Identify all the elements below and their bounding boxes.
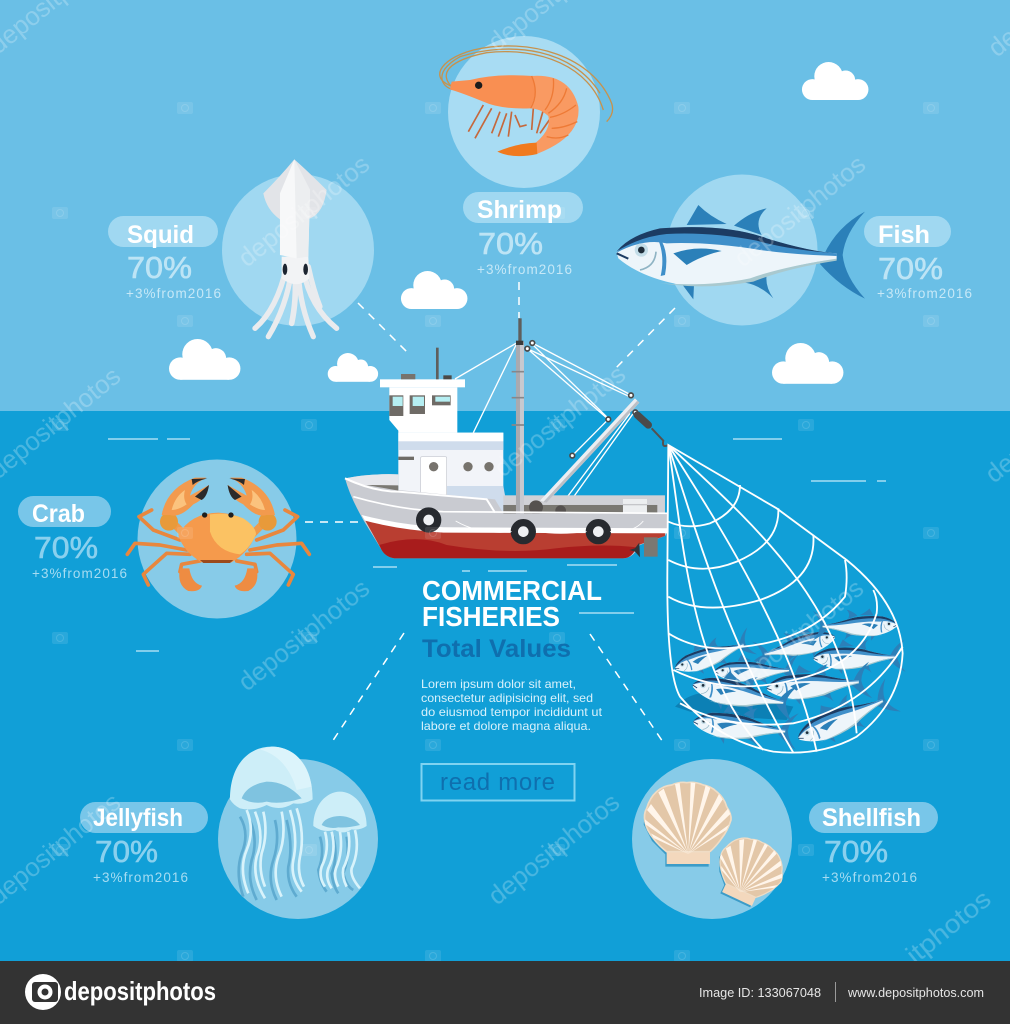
read more button: [422, 764, 574, 800]
dashed connector lines: [305, 282, 675, 745]
squid percent: 70%: [127, 250, 192, 285]
shellfish label pill: [809, 802, 938, 833]
shellfish percent: 70%: [824, 834, 888, 869]
jellyfish percent: 70%: [95, 834, 158, 869]
crab name: Crab: [32, 500, 85, 528]
fish percent: 70%: [878, 251, 943, 286]
central text block: [421, 575, 603, 800]
watermark: itphotos: [900, 883, 996, 970]
panel: squid: [108, 159, 374, 337]
illustration: fishing boat: [345, 318, 668, 558]
title line two: FISHERIES: [422, 601, 560, 632]
shrimp change note: +3%from2016: [477, 262, 572, 277]
panel: crab: [18, 460, 309, 618]
squid change note: +3%from2016: [126, 286, 221, 301]
fish label pill: [864, 216, 951, 247]
watermark: depositphotos: [728, 149, 871, 273]
icon: camera logo: [25, 974, 61, 1010]
footer bar: [0, 961, 1010, 1024]
icon: jellyfish: [230, 747, 367, 900]
watermark: depositphotos: [488, 359, 631, 483]
body paragraph: Lorem ipsum dolor sit amet,: [421, 677, 576, 691]
jellyfish label pill: [80, 802, 208, 833]
mast: [512, 318, 524, 515]
body paragraph: [421, 677, 603, 733]
sea background: [0, 411, 1010, 962]
shrimp label pill: [463, 192, 583, 223]
sky background: [0, 0, 1010, 412]
site url: www.depositphotos.com: [847, 986, 984, 1000]
upper cabin: [380, 348, 465, 433]
rudder and propeller: [629, 537, 658, 557]
panel: fish: [617, 174, 972, 326]
icon: tuna: [617, 205, 865, 299]
watermark: depositphotos: [482, 787, 625, 911]
watermark: depositphotos: [726, 573, 869, 697]
watermark: depositphotos: [232, 149, 375, 273]
icon: crab: [127, 478, 309, 591]
shellfish change note: +3%from2016: [822, 870, 917, 885]
panel: shrimp: [440, 36, 613, 277]
illustration: net with fish: [667, 445, 906, 756]
clouds: [169, 62, 868, 384]
fish change note: +3%from2016: [877, 286, 972, 301]
squid label pill: [108, 216, 218, 247]
hull: [345, 474, 668, 558]
crab circle: [138, 460, 296, 618]
school of tuna: [670, 609, 906, 756]
crab percent: 70%: [34, 530, 98, 565]
body paragraph: labore et dolore magna aliqua.: [421, 719, 591, 733]
shellfish name: Shellfish: [822, 804, 921, 832]
fish shadow: [675, 692, 793, 720]
panel: jellyfish: [80, 747, 378, 919]
crab change note: +3%from2016: [32, 566, 127, 581]
mooring ropes: [456, 521, 643, 533]
fish name: Fish: [878, 221, 930, 249]
watermark: depositphotos: [232, 573, 375, 697]
shrimp circle: [448, 36, 600, 188]
subtitle: Total Values: [422, 635, 571, 663]
watermark camera icons: [52, 102, 939, 962]
body paragraph: do eiusmod tempor incididunt ut: [421, 705, 603, 719]
icon: scallop shells: [644, 782, 793, 915]
rear deck: [503, 495, 665, 516]
title: COMMERCIAL: [422, 575, 602, 606]
jellyfish change note: +3%from2016: [93, 870, 188, 885]
squid circle: [222, 174, 374, 326]
shrimp percent: 70%: [478, 226, 543, 261]
jellyfish circle: [218, 759, 378, 919]
shrimp name: Shrimp: [477, 196, 562, 224]
tires: [420, 511, 607, 541]
jellyfish name: Jellyfish: [93, 804, 183, 832]
decorative water lines: [108, 439, 886, 651]
body paragraph: consectetur adipisicing elit, sed: [421, 691, 593, 705]
panel: shellfish: [632, 759, 938, 919]
net mesh: [667, 445, 903, 753]
logo wordmark: depositphotos: [64, 976, 216, 1006]
rigging lines: [455, 343, 633, 507]
pulleys and hook: [525, 341, 668, 458]
crab label pill: [18, 496, 111, 527]
icon: squid: [255, 159, 337, 337]
fish circle: [666, 174, 818, 326]
squid name: Squid: [127, 221, 194, 249]
lower cabin: [398, 433, 508, 513]
read more button: read more: [440, 769, 555, 796]
boom arm: [540, 398, 639, 503]
icon: shrimp: [440, 46, 613, 156]
image id: Image ID: 133067048: [699, 986, 821, 1000]
shellfish circle: [632, 759, 792, 919]
